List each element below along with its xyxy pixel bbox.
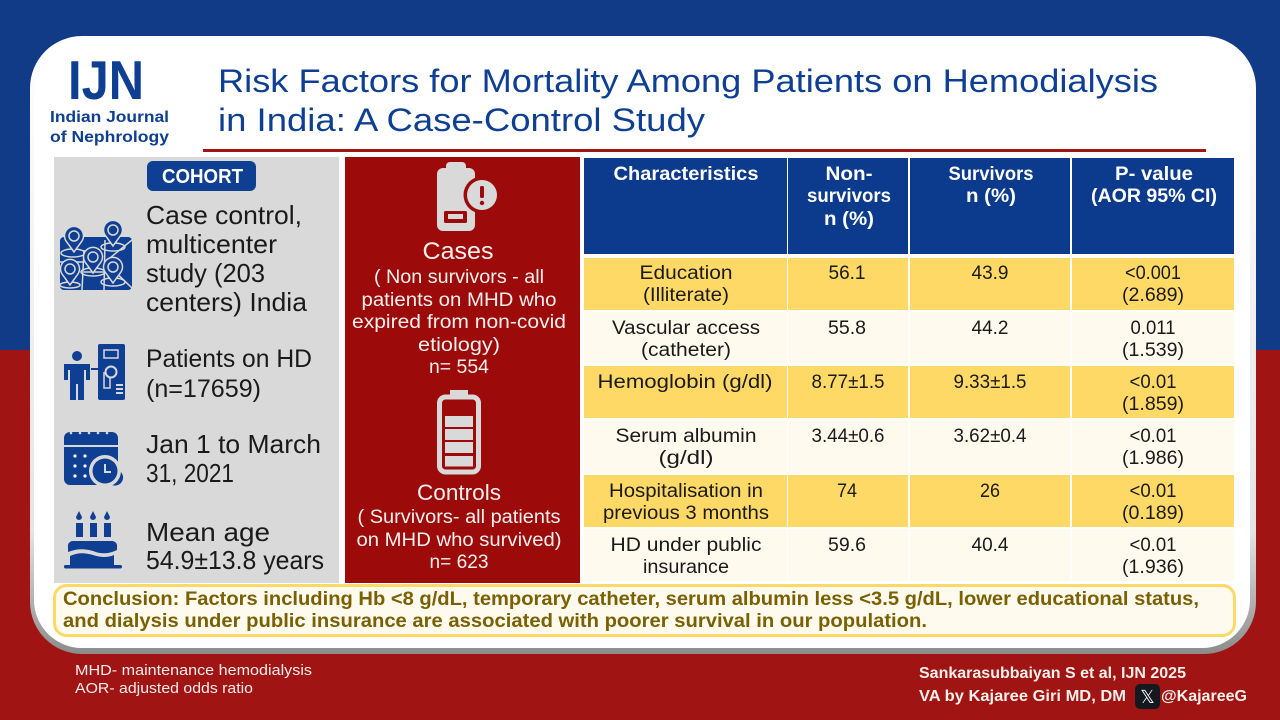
table header: n (%) — [824, 209, 874, 230]
footnote: abbreviations — [75, 663, 312, 697]
table header: Survivors — [948, 164, 1034, 185]
text: study design: centers) India — [146, 287, 308, 317]
row: hemoglobin: 9.33±1.5 — [954, 372, 1026, 393]
text: patients: Patients on HD — [146, 345, 312, 373]
row: vascular access: 55.8 — [828, 318, 866, 339]
logo: Indian Journal of Nephrology: Indian Journal — [50, 109, 169, 126]
row: hospitalisation: 74 — [837, 481, 857, 502]
row: hospitalisation — [584, 475, 1234, 527]
row: education: (Illiterate) — [643, 285, 729, 306]
row: education: 56.1 — [828, 263, 866, 284]
text: patients — [146, 345, 312, 403]
callout: conclusion: Conclusion: Factors including Hb <8 g/dL, temporary catheter, serum albumin less <3.5 g/dL, lower educational status, — [63, 589, 1199, 610]
citation and credit: @KajareeG — [1161, 688, 1247, 705]
cases text: Cases — [422, 238, 494, 265]
table header: P- value — [1115, 164, 1193, 185]
callout: conclusion: and dialysis under public insurance are associated with poorer survival in our population. — [63, 611, 927, 632]
row: hemoglobin: (1.859) — [1122, 394, 1184, 415]
row: serum albumin: 3.62±0.4 — [954, 426, 1027, 447]
row: education: 43.9 — [972, 263, 1008, 284]
text: study design — [146, 200, 308, 317]
row: public insurance: 40.4 — [972, 535, 1009, 556]
table header: Characteristics — [614, 164, 758, 185]
title — [218, 63, 1158, 138]
row: public insurance: insurance — [643, 557, 729, 578]
row: hemoglobin: Hemoglobin (g/dl) — [598, 372, 772, 393]
text: mean age: 54.9±13.8 years — [146, 545, 324, 575]
text: dates: 31, 2021 — [146, 458, 234, 488]
text: mean age — [146, 517, 324, 575]
table header — [584, 158, 1234, 254]
text: study design: multicenter — [146, 229, 277, 259]
cases text — [352, 238, 566, 378]
table header: n (%) — [966, 186, 1016, 207]
text: patients: (n=17659) — [146, 375, 261, 403]
citation and credit: Sankarasubbaiyan S et al, IJN 2025 — [919, 665, 1186, 682]
row: vascular access: 0.011 — [1130, 318, 1176, 339]
controls text: ( Survivors- all patients — [358, 507, 560, 528]
cases text: ( Non survivors - all — [374, 267, 544, 288]
row: public insurance: (1.936) — [1122, 557, 1184, 578]
row: hospitalisation: Hospitalisation in — [609, 481, 763, 502]
table: risk factors — [584, 158, 1234, 581]
row: education: Education — [640, 263, 732, 284]
cases text: expired from non-covid — [352, 312, 566, 333]
citation and credit — [919, 665, 1247, 709]
row: serum albumin: (1.986) — [1122, 448, 1184, 469]
icon: calendar with clock — [64, 432, 123, 487]
row: hemoglobin — [584, 366, 1234, 418]
callout: conclusion — [54, 586, 1234, 636]
cohort badge — [147, 161, 256, 191]
panel: cohort — [54, 157, 339, 583]
title: in India: A Case-Control Study — [218, 102, 705, 138]
row: hospitalisation: 26 — [980, 481, 1000, 502]
row: vascular access: 44.2 — [972, 318, 1008, 339]
footnote: abbreviations: MHD- maintenance hemodialysis — [75, 663, 312, 679]
text: study design: study (203 — [146, 258, 265, 288]
row: serum albumin — [584, 420, 1234, 473]
row: vascular access — [584, 312, 1234, 364]
text: mean age: Mean age — [146, 517, 270, 547]
row: serum albumin: Serum albumin — [616, 426, 756, 447]
row: vascular access: (1.539) — [1122, 340, 1184, 361]
icon: full battery — [440, 390, 478, 472]
citation and credit: VA by Kajaree Giri MD, DM — [919, 688, 1126, 705]
text: dates: Jan 1 to March — [146, 429, 321, 459]
row: hospitalisation: previous 3 months — [603, 503, 769, 524]
row: vascular access: (catheter) — [641, 340, 731, 361]
row: serum albumin: <0.01 — [1130, 426, 1176, 447]
row: public insurance: <0.01 — [1130, 535, 1176, 556]
title underline — [203, 149, 1206, 152]
cases text: n= 554 — [429, 357, 489, 378]
panel: cases and controls — [345, 157, 580, 583]
controls text: n= 623 — [430, 552, 488, 573]
row: education — [584, 258, 1234, 310]
row: education: <0.001 — [1125, 263, 1181, 284]
row: hospitalisation: <0.01 — [1130, 481, 1176, 502]
cohort badge: COHORT — [162, 166, 243, 188]
icon: birthday cake — [64, 511, 122, 568]
row: serum albumin: (g/dl) — [658, 448, 714, 469]
logo: Indian Journal of Nephrology: IJN — [68, 49, 144, 111]
row: vascular access: Vascular access — [612, 318, 760, 339]
icon: map with location pins — [60, 220, 132, 290]
icon: X logo — [1135, 684, 1160, 709]
cases text: patients on MHD who — [362, 290, 556, 311]
icon: X logo: 𝕏 — [1140, 687, 1155, 707]
controls text: on MHD who survived) — [356, 530, 562, 551]
title: Risk Factors for Mortality Among Patients on Hemodialysis — [218, 63, 1158, 99]
footnote: abbreviations: AOR- adjusted odds ratio — [75, 681, 253, 697]
table header: survivors — [807, 186, 891, 207]
icon: patient and dialysis machine — [64, 344, 125, 400]
row: public insurance: HD under public — [610, 535, 762, 556]
logo: Indian Journal of Nephrology: of Nephrology — [50, 129, 169, 146]
table header: (AOR 95% CI) — [1091, 186, 1217, 207]
row: hospitalisation: (0.189) — [1122, 503, 1184, 524]
text: dates — [146, 429, 321, 488]
table header: Non- — [826, 164, 872, 185]
row: hemoglobin: 8.77±1.5 — [812, 372, 884, 393]
cases text: etiology) — [418, 335, 500, 356]
row: public insurance: 59.6 — [828, 535, 866, 556]
row: education: (2.689) — [1122, 285, 1184, 306]
controls text: Controls — [417, 480, 501, 505]
controls text — [356, 480, 562, 573]
icon: low battery with alert — [437, 162, 500, 231]
row: public insurance — [584, 529, 1234, 581]
text: study design: Case control, — [146, 200, 302, 230]
row: serum albumin: 3.44±0.6 — [812, 426, 884, 447]
row: hemoglobin: <0.01 — [1130, 372, 1176, 393]
logo: Indian Journal of Nephrology — [50, 49, 169, 146]
